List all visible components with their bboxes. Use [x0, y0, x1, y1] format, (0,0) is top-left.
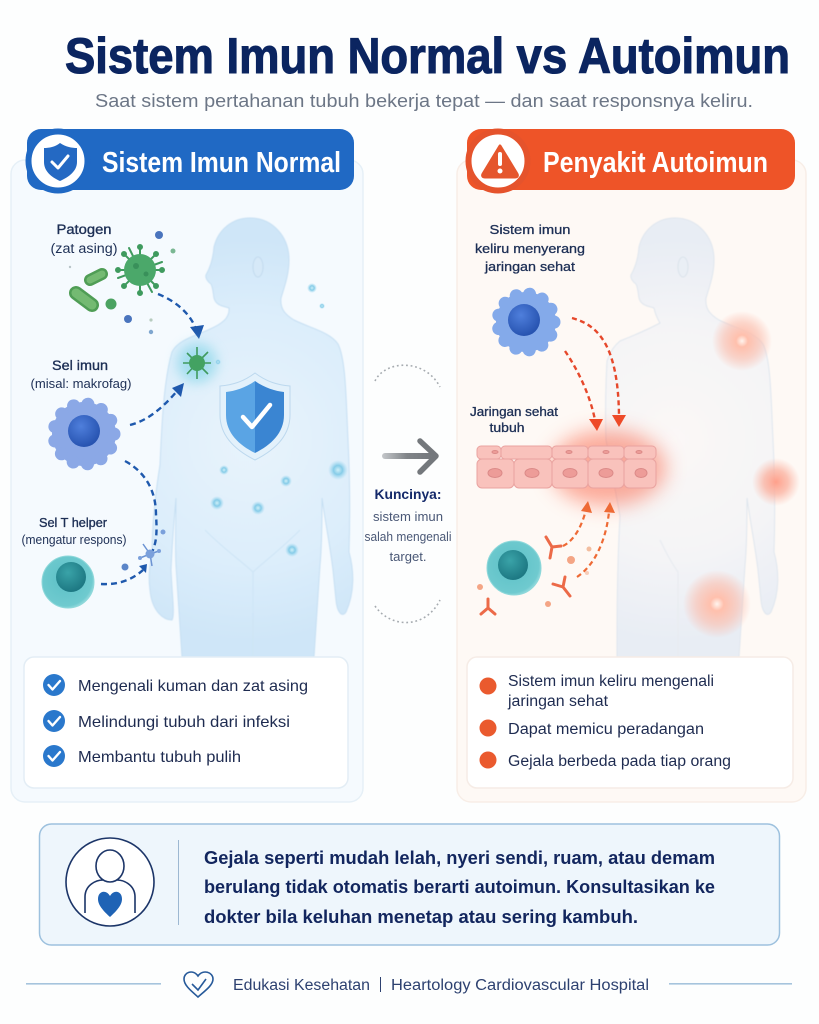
card: autoimmune bullet list [467, 657, 793, 788]
callout text [204, 847, 715, 927]
immune particles in body [210, 283, 348, 557]
header bar: autoimmune [467, 129, 795, 190]
bullet 1: jaringan sehat [507, 693, 609, 710]
header text: Sistem Imun Normal [102, 147, 341, 179]
footer [26, 972, 792, 997]
label: sistem imun keliru: keliru menyerang [475, 241, 585, 256]
inflammation glow: tissue [550, 430, 666, 506]
label: sistem imun keliru: Sistem imun [490, 222, 570, 237]
footer text: Edukasi Kesehatan [233, 977, 370, 994]
panel: autoimmune [457, 129, 806, 802]
icon: shield badge [28, 132, 88, 190]
arrow: pathogen to shoulder [158, 294, 204, 339]
label: mengatur respons: (mengatur respons) [22, 533, 126, 547]
callout text: Gejala seperti mudah lelah, nyeri sendi, ruam, atau demam [204, 847, 715, 868]
header text: Penyakit Autoimun [543, 147, 768, 179]
label: sel imun: Sel imun [52, 358, 108, 373]
icon: virus [116, 245, 164, 295]
particles: orange [477, 546, 592, 607]
arrowheads [589, 415, 626, 431]
bullet 2: Melindungi tubuh dari infeksi [78, 714, 290, 731]
label: patogen: Patogen [56, 222, 112, 237]
icon: central shield [220, 373, 290, 460]
callout text: berulang tidak otomatis berarti autoimun. Konsultasikan ke [204, 876, 715, 897]
label: sistem imun keliru: jaringan sehat [484, 259, 575, 274]
key text: target. [390, 550, 426, 564]
arrow: macrophage to infection [130, 383, 184, 425]
key text: sistem imun [373, 510, 443, 524]
key text: salah mengenali [364, 530, 452, 544]
bullet 3: Gejala berbeda pada tiap orang [508, 753, 731, 770]
particles near pathogen [69, 231, 176, 334]
card: normal bullet list [24, 657, 348, 788]
dotted arc top [375, 365, 440, 387]
icons: antibodies [481, 537, 570, 614]
inflammation: elbow [752, 458, 800, 506]
bullet 3: Membantu tubuh pulih [78, 749, 241, 766]
arrow: macrophage to helper [125, 461, 157, 552]
callout text: dokter bila keluhan menetap atau sering kambuh. [204, 906, 638, 927]
key text: Kuncinya: [374, 486, 442, 502]
footer: Heartology Cardiovascular Hospital [391, 977, 649, 994]
arrows: attack from above [565, 318, 619, 420]
arrow: normal to autoimmune [382, 441, 436, 472]
callout: consultation note [40, 824, 780, 945]
icon: t cell [487, 541, 541, 595]
label: zat asing: (zat asing) [50, 241, 118, 256]
body silhouette [606, 218, 778, 657]
panel: normal immune system [11, 129, 363, 802]
tissue [477, 446, 656, 488]
icon: heart logo [184, 972, 213, 997]
bullet 2 [43, 710, 290, 732]
label: sistem imun keliru [475, 222, 585, 274]
inflammation: shoulder [712, 311, 772, 371]
label: sel t helper: Sel T helper [39, 515, 108, 530]
bullet 1 [480, 673, 714, 710]
bullet 3 [43, 745, 241, 767]
arrow: helper to signal [101, 564, 147, 584]
icon: bacteria [76, 274, 116, 310]
panel background [11, 160, 363, 802]
key text [364, 486, 452, 564]
divider [178, 840, 179, 925]
arrows: attack from below [563, 510, 609, 577]
arrowheads [581, 501, 615, 513]
icon: signal molecule [122, 530, 166, 570]
label: jaringan sehat tubuh: tubuh [490, 421, 525, 435]
body silhouette [149, 218, 353, 657]
icon: macrophage [496, 292, 556, 352]
dotted arc bottom [375, 600, 440, 623]
header bar: normal [27, 129, 354, 190]
icon: infected spot [177, 343, 217, 383]
bullet 2: Dapat memicu peradangan [508, 721, 704, 738]
icon: person with heart [66, 838, 154, 926]
icon: t helper cell [42, 556, 94, 608]
inflammation: thigh [683, 570, 751, 638]
label: misal makrofag: (misal: makrofag) [30, 377, 132, 391]
subtitle: Saat sistem pertahanan tubuh bekerja tepat — dan saat responsnya keliru. [95, 90, 753, 111]
label: jaringan sehat tubuh [470, 405, 559, 435]
panel background [457, 160, 806, 802]
center key message [364, 365, 452, 623]
bullet 1: Sistem imun keliru mengenali [508, 673, 714, 690]
icon: macrophage [52, 402, 116, 466]
icon: warning badge [468, 132, 528, 190]
bullet 1 [43, 674, 308, 696]
label: jaringan sehat tubuh: Jaringan sehat [470, 405, 559, 419]
bullet 1: Mengenali kuman dan zat asing [78, 678, 308, 695]
